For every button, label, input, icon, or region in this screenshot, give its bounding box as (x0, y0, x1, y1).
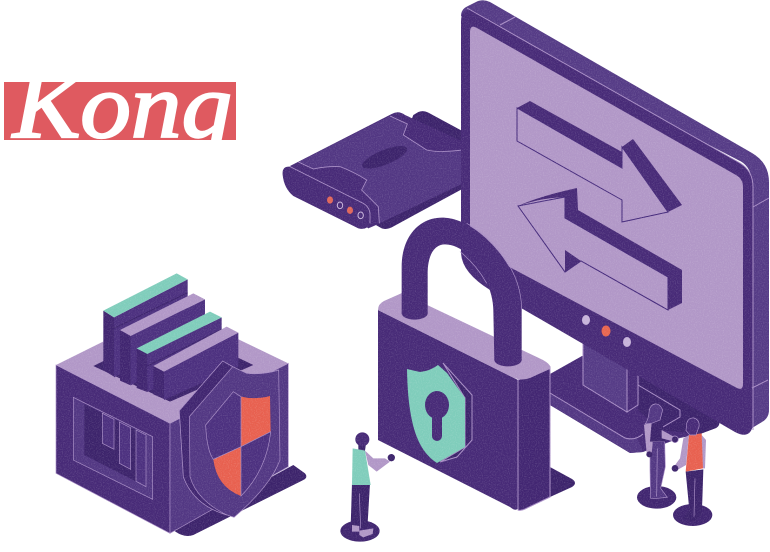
storage box with books and shield (56, 273, 306, 536)
monitor body (461, 0, 769, 435)
man in red vest (672, 418, 712, 526)
box left face (56, 365, 170, 533)
monitor bezel (461, 10, 753, 435)
padlock top (378, 293, 550, 380)
box ground shadow (173, 465, 306, 536)
monitor indicator lights (582, 315, 631, 347)
padlock ground shadow (550, 467, 575, 497)
monitor stand and base (550, 342, 719, 453)
padlock (378, 218, 575, 510)
book four (153, 327, 238, 400)
logo: Kong wordmark (4, 82, 236, 140)
monitor top and right edge (461, 0, 769, 428)
padlock front (378, 310, 518, 510)
box window with book spines (73, 397, 153, 499)
book one (103, 273, 188, 377)
icon: large quartered shield (179, 361, 280, 517)
arrow: pointing right (517, 101, 682, 222)
box right face (170, 363, 288, 533)
book three (137, 312, 222, 392)
icon: external hard drive (283, 111, 467, 229)
book two (120, 293, 205, 385)
person: man in teal vest (340, 432, 395, 542)
padlock side (518, 367, 550, 510)
padlock shackle (402, 218, 522, 366)
icon: teal shield with keyhole (407, 363, 472, 463)
woman (637, 404, 678, 509)
logo: Kong wordmark: Kong (11, 55, 232, 157)
monitor screen (470, 27, 743, 389)
arrow: pointing left (518, 188, 682, 310)
people: woman and man shaking hands (637, 404, 712, 526)
box top rim (56, 307, 288, 423)
